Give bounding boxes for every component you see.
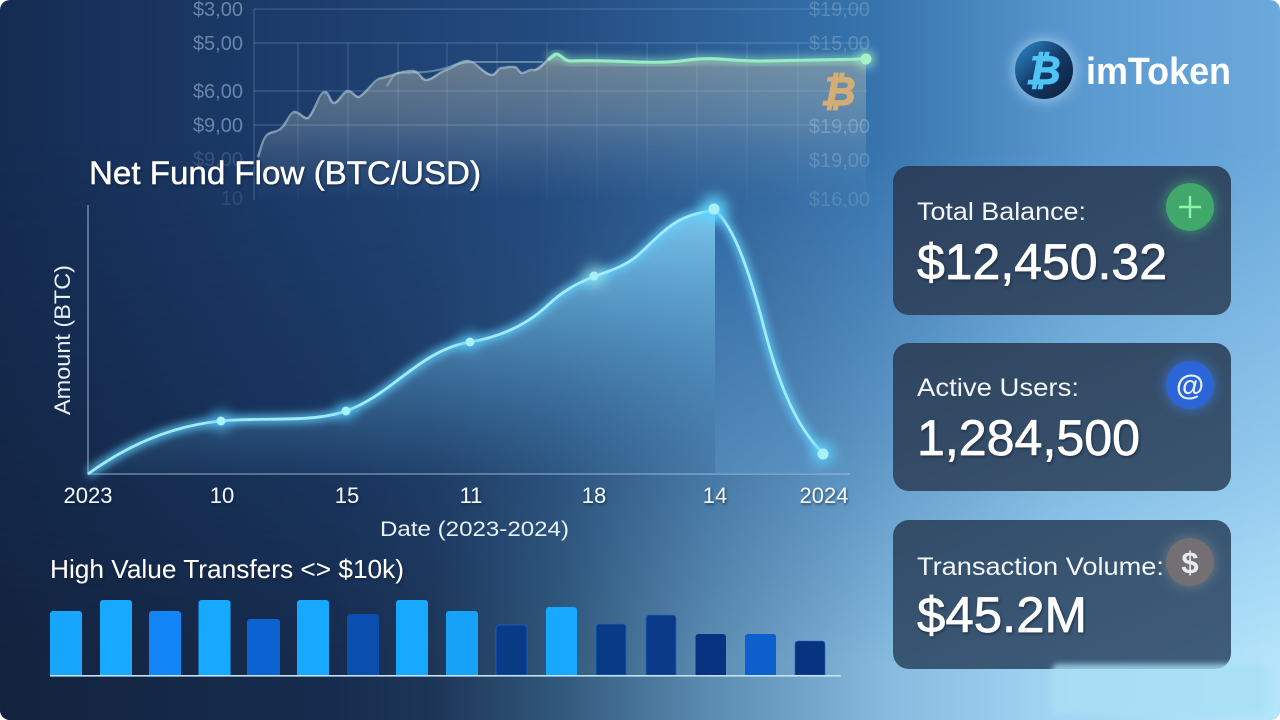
bar baseline — [50, 675, 841, 677]
price chart area fill — [258, 54, 866, 200]
right axis price labels: $19,00 — [809, 116, 870, 138]
logo: imToken — [1012, 38, 1231, 102]
right axis price labels: $16,00 — [809, 189, 870, 211]
y axis label: Amount (BTC) — [50, 265, 75, 415]
x axis labels: 15 — [335, 483, 359, 508]
main line chart — [50, 195, 850, 541]
value: $45.2M — [917, 587, 1087, 643]
left axis price labels: $9,00 — [193, 149, 243, 171]
logo glow — [1012, 38, 1076, 102]
curve line — [88, 210, 823, 474]
green end point — [856, 49, 876, 69]
x axis labels: 18 — [582, 483, 606, 508]
area after peak — [715, 210, 823, 474]
title: Net Fund Flow (BTC/USD) — [89, 155, 481, 191]
x axis title: Date (2023-2024) — [380, 518, 569, 541]
value: 1,284,500 — [917, 410, 1140, 466]
x axis labels: 2023 — [64, 483, 112, 508]
panel: transaction volume — [893, 520, 1231, 669]
data points — [210, 195, 835, 466]
bar chart — [50, 600, 841, 677]
value: $12,450.32 — [917, 234, 1167, 290]
logo: imToken: ₿ — [1025, 49, 1061, 93]
x axis labels: 11 — [460, 483, 482, 508]
label: Active Users: — [917, 374, 1079, 402]
right axis price labels — [809, 0, 870, 211]
label: Transaction Volume: — [917, 553, 1164, 581]
price line — [258, 54, 570, 157]
icon: at sign — [1164, 359, 1216, 411]
left axis price labels: $9,00 — [193, 115, 243, 137]
icon: bitcoin gold: ₿ — [820, 70, 856, 114]
icon: dollar — [1164, 536, 1216, 588]
label: Total Balance: — [917, 198, 1086, 226]
curve glow — [88, 210, 823, 474]
second price strand — [387, 62, 543, 86]
right axis price labels: $19,00 — [809, 150, 870, 172]
left axis price labels: 10 — [221, 188, 243, 210]
left axis price labels — [193, 0, 243, 210]
panel: total balance — [893, 166, 1231, 315]
axes — [88, 205, 850, 474]
green line — [548, 54, 866, 62]
icon: bitcoin logo — [1015, 41, 1073, 99]
right axis price labels: $15,00 — [809, 33, 870, 55]
area under curve — [88, 210, 715, 474]
panel: active users — [893, 343, 1231, 491]
icon: dollar: $ — [1181, 545, 1199, 580]
background price chart — [193, 0, 876, 211]
x axis labels: 10 — [210, 483, 234, 508]
icon: plus — [1164, 181, 1216, 233]
left axis price labels: $5,00 — [193, 33, 243, 55]
brand name: imToken — [1086, 51, 1231, 93]
x axis labels: 2024 — [800, 483, 848, 508]
high value transfers heading: High Value Transfers <> $10k) — [50, 554, 404, 584]
x axis labels — [64, 483, 848, 508]
icon: at sign: @ — [1176, 370, 1204, 402]
x axis labels: 14 — [703, 483, 727, 508]
left axis price labels: $6,00 — [193, 81, 243, 103]
watermark patch — [1052, 664, 1267, 714]
green line glow — [548, 54, 866, 62]
